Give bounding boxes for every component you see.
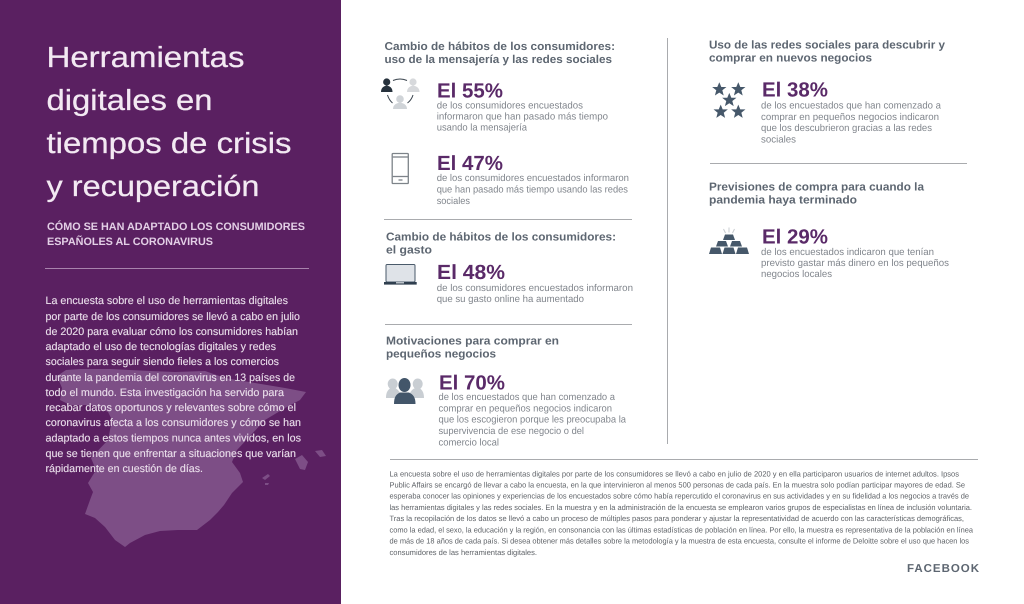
stat: 29% bbox=[761, 225, 949, 280]
heading: pandemia haya terminado bbox=[709, 194, 857, 206]
intro text block: adaptado el uso de tecnologías digitales y redes bbox=[46, 341, 277, 353]
stat: 55%: informaron que han pasado más tiempo bbox=[437, 112, 609, 122]
section: spending habits bbox=[384, 232, 633, 305]
section: motivations bbox=[386, 335, 627, 448]
intro text block: por parte de los consumidores se llevó a cabo en julio bbox=[46, 311, 300, 323]
intro text block: que se tienen que enfrentar a situaciones que varían bbox=[46, 448, 296, 460]
title bbox=[46, 42, 292, 203]
heading bbox=[709, 40, 946, 65]
heading: Cambio de hábitos de los consumidores: bbox=[386, 232, 616, 244]
intro text block: todo el mundo. Esta investigación ha servido para bbox=[46, 387, 284, 399]
logo: Facebook wordmark: FACEBOOK bbox=[907, 563, 980, 575]
stat: 38%: de los encuestados que han comenzado a bbox=[761, 101, 942, 112]
stat: 48%: que su gasto online ha aumentado bbox=[437, 294, 585, 305]
icon: smartphone bbox=[392, 154, 408, 184]
footnote: methodology: como la edad, el sexo, la educación y la región, en consonancia con las últimas estadísticas de población en línea. Por ello, la muestra es representativa de la población en línea bbox=[390, 526, 974, 535]
panel: left purple intro bbox=[0, 0, 341, 604]
heading bbox=[709, 181, 925, 206]
title: digitales en bbox=[46, 85, 212, 117]
heading: comprar en nuevos negocios bbox=[709, 53, 872, 65]
footnote: methodology: de más de 18 años de cada país. Si desea obtener más detalles sobre la metodología y la muestra de esta encuesta, consulte el informe de Deloitte sobre el uso que hacen los bbox=[390, 537, 969, 546]
footnote: methodology: Public Affairs se encargó de llevar a cabo la encuesta, en la que intervinieron al menos 500 personas de cada país. En la muestra solo podían participar mayores de edad. Se bbox=[390, 480, 965, 489]
heading: Uso de las redes sociales para descubrir y bbox=[709, 40, 946, 52]
map: Spain silhouette bbox=[57, 369, 326, 547]
stat: 55%: usando la mensajería bbox=[437, 123, 528, 134]
stat: 47% bbox=[437, 152, 629, 207]
stat: 70%: de los encuestados que han comenzado a bbox=[438, 392, 616, 403]
stat: 70%: supervivencia de ese negocio o del bbox=[438, 426, 584, 437]
subtitle: CÓMO SE HAN ADAPTADO LOS CONSUMIDORES bbox=[47, 220, 305, 233]
heading: Previsiones de compra para cuando la bbox=[709, 181, 925, 193]
stat: 47%: de los consumidores encuestados informaron bbox=[437, 173, 629, 184]
subtitle: ESPAÑOLES AL CORONAVIRUS bbox=[47, 235, 213, 248]
stat: 55% bbox=[437, 79, 609, 134]
heading bbox=[384, 41, 615, 66]
stat: 55%: de los consumidores encuestados bbox=[437, 101, 583, 112]
heading bbox=[386, 232, 616, 256]
icon: connected people bbox=[381, 78, 420, 109]
subtitle bbox=[47, 220, 305, 248]
footnote: methodology bbox=[390, 469, 974, 557]
stat: 55%: El 55% bbox=[437, 79, 503, 102]
stat: 47%: sociales bbox=[437, 196, 470, 207]
stat: 29%: El 29% bbox=[762, 225, 828, 248]
stat: 70%: comprar en pequeños negocios indicaron bbox=[438, 403, 612, 414]
stat: 70%: El 70% bbox=[439, 371, 505, 394]
icon: laptop bbox=[384, 264, 417, 285]
intro text block: rápidamente en cuestión de días. bbox=[46, 463, 203, 475]
section: messaging and social habits bbox=[381, 41, 629, 207]
heading: el gasto bbox=[386, 244, 432, 256]
stat: 29%: negocios locales bbox=[761, 269, 832, 280]
heading: pequeños negocios bbox=[386, 349, 496, 361]
intro text block: adaptado a estos tiempos nunca antes vividos, en los bbox=[46, 432, 302, 444]
heading: uso de la mensajería y las redes sociales bbox=[384, 54, 612, 66]
section: post-pandemic purchases bbox=[709, 181, 949, 280]
icon: gold bars bbox=[709, 228, 749, 254]
stat: 29%: de los encuestados indicaron que tenían bbox=[761, 247, 934, 258]
stat: 38%: sociales bbox=[761, 134, 796, 145]
stat: 70%: comercio local bbox=[438, 438, 499, 448]
stat: 48%: de los consumidores encuestados informaron bbox=[437, 283, 633, 294]
section: social discovery bbox=[709, 40, 946, 145]
footnote: methodology: esperaba conocer las opiniones y experiencias de los encuestados sobre cómo había repercutido el coronavirus en sus actividades y en su fidelidad a los negocios a través de bbox=[390, 492, 969, 501]
stat: 70%: que los escogieron porque les preocupaba la bbox=[438, 415, 627, 426]
footnote: methodology: La encuesta sobre el uso de herramientas digitales por parte de los consumidores se llevó a cabo en julio de 2020 y en ella participaron usuarios de internet adultos. Ipsos bbox=[390, 469, 959, 478]
footnote: methodology: consumidores de las herramientas digitales. bbox=[390, 548, 537, 557]
intro text block: de 2020 para evaluar cómo los consumidores habían bbox=[46, 326, 298, 338]
heading: Cambio de hábitos de los consumidores: bbox=[384, 41, 615, 53]
heading bbox=[386, 335, 559, 361]
stat: 38% bbox=[761, 79, 942, 145]
icon: five stars bbox=[713, 83, 745, 117]
intro text block: durante la pandemia del coronavirus en 13 países de bbox=[46, 372, 295, 384]
title: y recuperación bbox=[46, 171, 260, 203]
stat: 48% bbox=[437, 261, 633, 305]
stat: 47%: El 47% bbox=[437, 152, 503, 175]
stat: 38%: que los descubrieron gracias a las redes bbox=[761, 123, 932, 134]
stat: 48%: El 48% bbox=[437, 261, 505, 284]
intro text block: recabar datos oportunos y relevantes sobre cómo el bbox=[46, 402, 296, 414]
title: Herramientas bbox=[46, 42, 244, 74]
intro text block: sociales para seguir siendo fieles a los comercios bbox=[46, 356, 280, 368]
heading: Motivaciones para comprar en bbox=[386, 335, 559, 347]
title: tiempos de crisis bbox=[46, 128, 292, 160]
stat: 38%: comprar en pequeños negocios indicaron bbox=[761, 112, 939, 123]
footnote: methodology: Tras la recopilación de los datos se llevó a cabo un proceso de múltiples pasos para ponderar y ajustar la representatividad de acuerdo con las características demográficas, bbox=[390, 514, 964, 523]
icon: group of people bbox=[386, 378, 424, 404]
intro text block bbox=[46, 295, 302, 475]
stat: 29%: previsto gastar más dinero en los pequeños bbox=[761, 258, 949, 269]
intro text block: La encuesta sobre el uso de herramientas digitales bbox=[46, 295, 289, 307]
intro text block: coronavirus afecta a los consumidores y cómo se han bbox=[46, 417, 301, 429]
stat: 47%: que han pasado más tiempo usando las redes bbox=[437, 184, 628, 196]
footnote: methodology: las herramientas digitales y las redes sociales. En la muestra y en la administración de la encuesta se emplearon varios grupos de especialistas en línea de inclusión voluntaria. bbox=[390, 503, 972, 512]
stat: 38%: El 38% bbox=[762, 79, 828, 102]
stat: 70% bbox=[438, 371, 627, 448]
